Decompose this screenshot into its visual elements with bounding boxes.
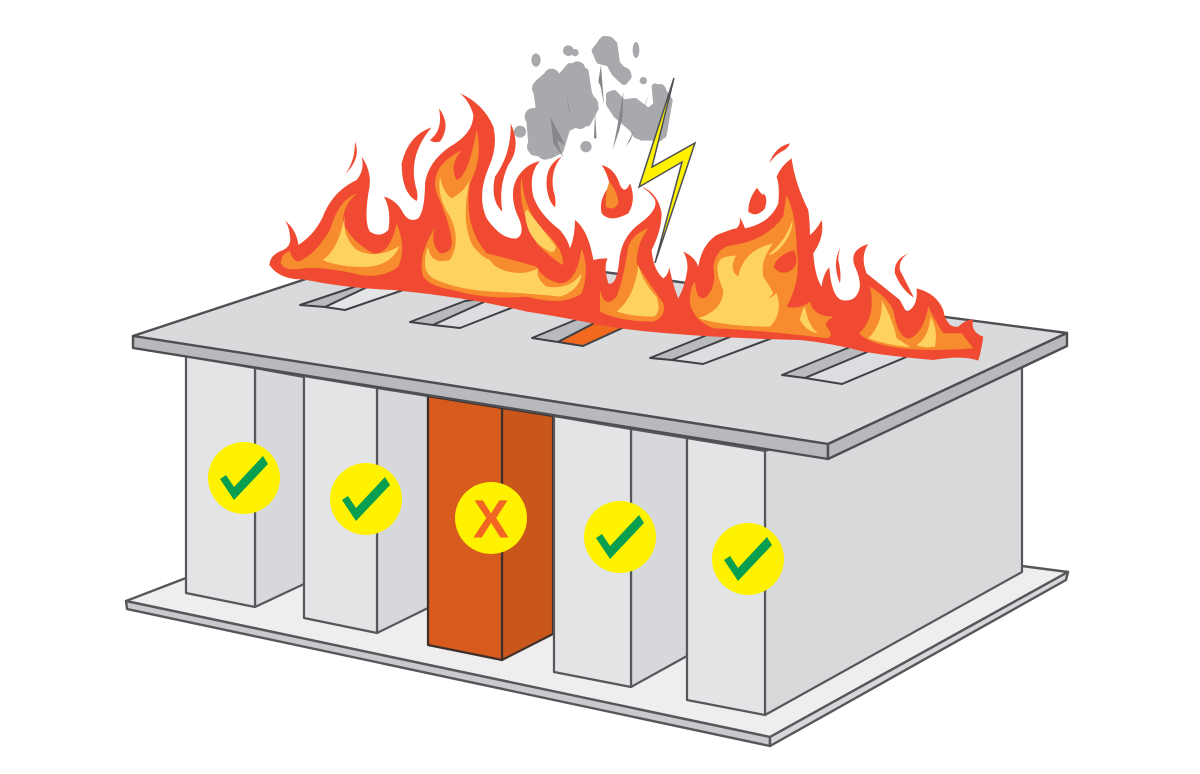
status badge: check, column 2 [330, 463, 402, 535]
vent 5 [782, 347, 911, 384]
orange flame layers [281, 130, 973, 350]
status badge: failed X, column 3 [455, 482, 527, 554]
status badge: check, column 1 [208, 442, 280, 514]
small flame core [606, 182, 618, 209]
flames [269, 93, 983, 361]
column 5 and long side wall [687, 366, 1022, 715]
vent 1 [300, 282, 412, 310]
vent 3: failed, orange [532, 315, 640, 346]
status badge: check, column 5 [712, 523, 784, 595]
column 3: failed orange rack [428, 396, 553, 660]
column 1 [186, 356, 304, 607]
lightning bolt [639, 78, 695, 263]
smoke left mass [530, 67, 595, 155]
yellow flame cores [323, 177, 936, 347]
status badge: check, column 4 [584, 501, 656, 573]
flame outer body [269, 93, 983, 361]
detached flame licks [345, 108, 914, 298]
status badge: failed X, column 3: X [473, 490, 509, 550]
smoke cloud [514, 36, 669, 160]
red drop inside right flame [774, 250, 796, 273]
base plate [126, 566, 1068, 746]
column 4 [554, 416, 687, 687]
column 2 [304, 376, 428, 633]
roof slab [133, 246, 1067, 459]
smoke right mass [609, 87, 669, 137]
vent 2 [410, 297, 524, 328]
roof vents [300, 282, 911, 384]
vent 4 [650, 333, 775, 364]
smoke top mass [595, 39, 628, 82]
